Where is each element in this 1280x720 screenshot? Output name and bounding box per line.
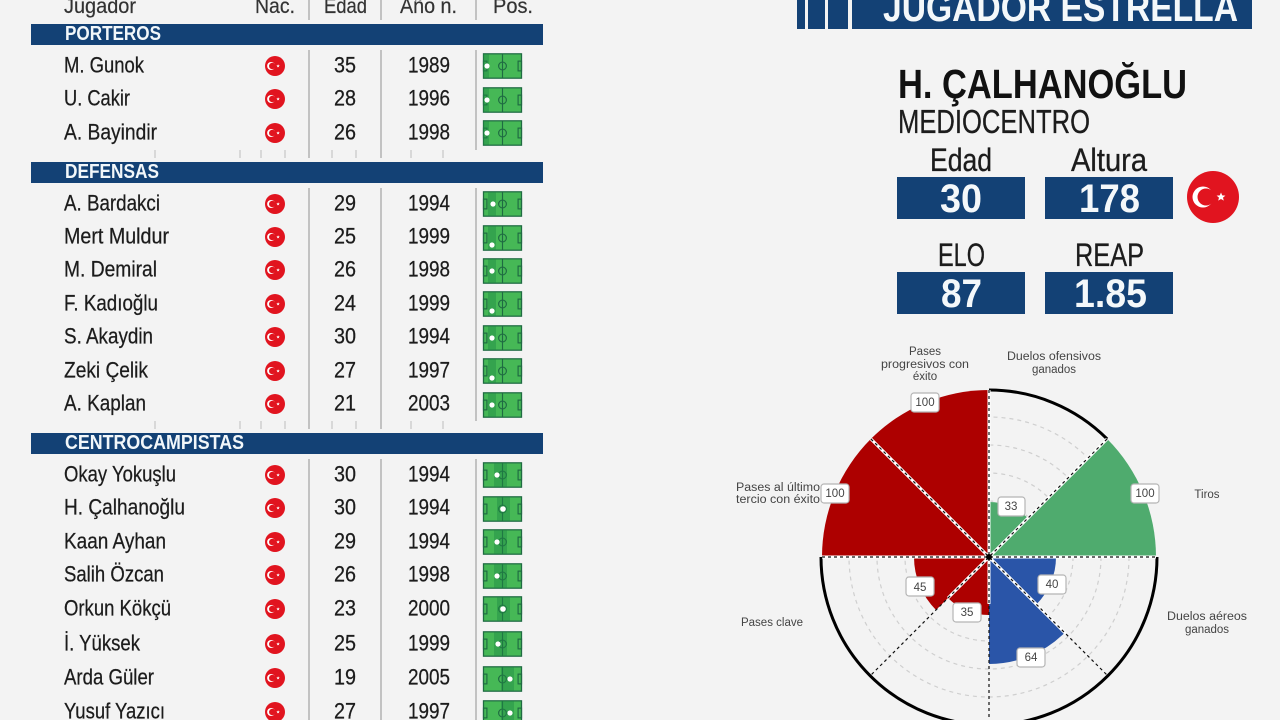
- row: A. Bardakci: [64, 190, 522, 216]
- row: H. Çalhanoğlu: [64, 494, 522, 521]
- row: S. Akaydin: [64, 323, 522, 350]
- sector: pases al ultimo tercio: [822, 439, 989, 557]
- row: H. Çalhanoğlu: H. Çalhanoğlu: [64, 494, 185, 519]
- player name: H. ÇALHANOĞLU: [898, 61, 1187, 107]
- polar chart: [736, 346, 1247, 720]
- row: Zeki Çelik: Zeki Çelik: [64, 357, 149, 382]
- section heading: porteros: PORTEROS: [65, 23, 161, 45]
- value label 100 progresivos: [911, 393, 939, 412]
- value label 45: [906, 577, 934, 596]
- row: A. Kaplan: 21: [334, 390, 356, 415]
- row: Orkun Kökçü: Orkun Kökçü: [64, 595, 171, 620]
- axis label: pases progresivos: éxito: [913, 371, 937, 383]
- stat: altura: [1045, 142, 1173, 221]
- row: Zeki Çelik: [64, 357, 522, 383]
- value label 100 ultimo tercio: [821, 484, 849, 503]
- section heading: defensas: [31, 161, 543, 183]
- row: Kaan Ayhan: 29: [334, 528, 356, 553]
- row: M. Gunok: 35: [334, 52, 356, 77]
- row: M. Demiral: 1998: [408, 256, 450, 281]
- axis label: duelos ofensivos: Duelos ofensivos: [1007, 351, 1101, 363]
- stat: elo: ELO: [938, 237, 985, 273]
- row: M. Gunok: 1989: [408, 52, 450, 77]
- row: H. Çalhanoğlu: 1994: [408, 494, 450, 519]
- row: U. Cakir: [64, 85, 522, 112]
- row: Zeki Çelik: 27: [334, 357, 356, 382]
- sector: red 35: [948, 557, 989, 615]
- row: H. Çalhanoğlu: 30: [334, 494, 356, 519]
- stat: elo: [897, 237, 1025, 316]
- value label 64: 64: [1025, 652, 1038, 664]
- row: Arda Güler: Arda Güler: [64, 664, 154, 689]
- row: F. Kadıoğlu: 24: [334, 290, 356, 315]
- stat: edad: 30: [940, 177, 982, 221]
- value label 35: 35: [961, 607, 973, 619]
- row: S. Akaydin: 30: [334, 323, 356, 348]
- axis label: pases clave: Pases clave: [741, 617, 803, 629]
- section heading: centrocampistas: [31, 432, 543, 454]
- row: A. Bayindir: 1998: [408, 119, 450, 144]
- section heading: centrocampistas: CENTROCAMPISTAS: [65, 432, 244, 454]
- row: İ. Yüksek: 25: [334, 630, 356, 655]
- sector: pases progresivos: [871, 390, 989, 557]
- row: Okay Yokuşlu: Okay Yokuşlu: [64, 461, 176, 486]
- row: M. Demiral: [64, 256, 522, 283]
- row: Mert Muldur: 25: [334, 223, 356, 248]
- row: Arda Güler: 2005: [408, 664, 450, 689]
- value label 33: 33: [1005, 501, 1017, 513]
- axis label: duelos aereos: [1167, 611, 1247, 636]
- row: A. Kaplan: [64, 390, 522, 417]
- row: U. Cakir: U. Cakir: [64, 85, 130, 110]
- axis label: tiros: Tiros: [1194, 489, 1220, 501]
- outer arcs: [821, 390, 1157, 720]
- row: A. Bayindir: [64, 119, 522, 145]
- value label 100 ultimo tercio: 100: [825, 488, 845, 500]
- row: Arda Güler: [64, 664, 522, 691]
- axis label: pases progresivos: Pases: [909, 346, 941, 358]
- row: Zeki Çelik: 1997: [408, 357, 450, 382]
- stat: edad: Edad: [930, 142, 992, 178]
- stat: reap: REAP: [1075, 237, 1144, 273]
- radial spokes: [822, 390, 1156, 720]
- row: Okay Yokuşlu: [64, 461, 522, 487]
- axis label: pases al ultimo tercio: Pases al último: [736, 482, 820, 494]
- row: M. Demiral: 26: [334, 256, 356, 281]
- stat: altura: 178: [1079, 177, 1140, 221]
- value label 35: [953, 603, 981, 622]
- section heading: porteros: [31, 23, 543, 45]
- value label 100 progresivos: 100: [915, 397, 935, 409]
- stat: altura: Altura: [1071, 142, 1147, 178]
- row: A. Bardakci: 1994: [408, 190, 450, 215]
- axis label: pases progresivos: progresivos con: [881, 359, 969, 371]
- row: Mert Muldur: [64, 223, 522, 250]
- section heading: defensas: DEFENSAS: [65, 161, 159, 183]
- row: F. Kadıoğlu: F. Kadıoğlu: [64, 290, 158, 315]
- axis label: duelos aereos: ganados: [1185, 624, 1229, 636]
- row: M. Demiral: M. Demiral: [64, 256, 157, 281]
- value label 45: 45: [914, 582, 926, 594]
- row: S. Akaydin: S. Akaydin: [64, 323, 153, 348]
- sector: tiros: [989, 439, 1156, 557]
- value label 40: 40: [1046, 579, 1058, 591]
- row: İ. Yüksek: İ. Yüksek: [64, 630, 141, 655]
- row: M. Gunok: M. Gunok: [64, 52, 145, 77]
- row: Mert Muldur: 1999: [408, 223, 450, 248]
- row: İ. Yüksek: [64, 630, 522, 656]
- row: U. Cakir: 28: [334, 85, 356, 110]
- sector: duelos ofensivos ganados: [989, 502, 1028, 557]
- row: Arda Güler: 19: [334, 664, 356, 689]
- axis label: duelos ofensivos: [1007, 351, 1101, 376]
- row: Salih Özcan: [64, 561, 522, 588]
- row: S. Akaydin: 1994: [408, 323, 450, 348]
- sector: duelos aereos (b): [989, 557, 1065, 664]
- row: A. Bayindir: 26: [334, 119, 356, 144]
- axis label: duelos ofensivos: ganados: [1032, 364, 1076, 376]
- row: Okay Yokuşlu: 30: [334, 461, 356, 486]
- row: Orkun Kökçü: 2000: [408, 595, 450, 620]
- row: F. Kadıoğlu: 1999: [408, 290, 450, 315]
- stat: elo: 87: [941, 272, 982, 316]
- row: Kaan Ayhan: [64, 528, 522, 554]
- sector: duelos aereos (a): [989, 557, 1056, 604]
- table column headers: [64, 0, 533, 20]
- icon: turkey flag: [1187, 171, 1239, 223]
- row: A. Kaplan: 2003: [408, 390, 450, 415]
- row: F. Kadıoğlu: [64, 290, 522, 316]
- row: Yusuf Yazıcı: [64, 698, 522, 720]
- row: Okay Yokuşlu: 1994: [408, 461, 450, 486]
- row: Salih Özcan: 26: [334, 561, 356, 586]
- row: Orkun Kökçü: [64, 595, 522, 621]
- row: Kaan Ayhan: Kaan Ayhan: [64, 528, 166, 553]
- value label 33: [998, 497, 1025, 516]
- row: Mert Muldur: Mert Muldur: [64, 223, 169, 248]
- value label 40: [1038, 575, 1066, 594]
- row: Salih Özcan: Salih Özcan: [64, 561, 164, 586]
- sector: pases clave: [914, 557, 989, 610]
- row: U. Cakir: 1996: [408, 85, 450, 110]
- row: M. Gunok: [64, 52, 522, 78]
- axis label: pases progresivos: [881, 346, 969, 383]
- value label 100 tiros: 100: [1135, 488, 1155, 500]
- row: Kaan Ayhan: 1994: [408, 528, 450, 553]
- row: İ. Yüksek: 1999: [408, 630, 450, 655]
- player position: MEDIOCENTRO: [898, 103, 1090, 140]
- stat: reap: 1.85: [1074, 272, 1147, 316]
- row: Orkun Kökçü: 23: [334, 595, 356, 620]
- axis label: pases al ultimo tercio: tercio con éxito: [736, 494, 820, 506]
- row: A. Bardakci: A. Bardakci: [64, 190, 160, 215]
- row: A. Bayindir: A. Bayindir: [64, 119, 157, 144]
- axis label: duelos aereos: Duelos aéreos: [1167, 611, 1247, 623]
- row: A. Kaplan: A. Kaplan: [64, 390, 146, 415]
- row: A. Bardakci: 29: [334, 190, 356, 215]
- axis label: pases al ultimo tercio: [736, 482, 820, 506]
- row: Salih Özcan: 1998: [408, 561, 450, 586]
- value label 100 tiros: [1131, 484, 1159, 503]
- value label 64: [1017, 648, 1045, 667]
- stat: edad: [897, 142, 1025, 221]
- stat: reap: [1045, 237, 1173, 316]
